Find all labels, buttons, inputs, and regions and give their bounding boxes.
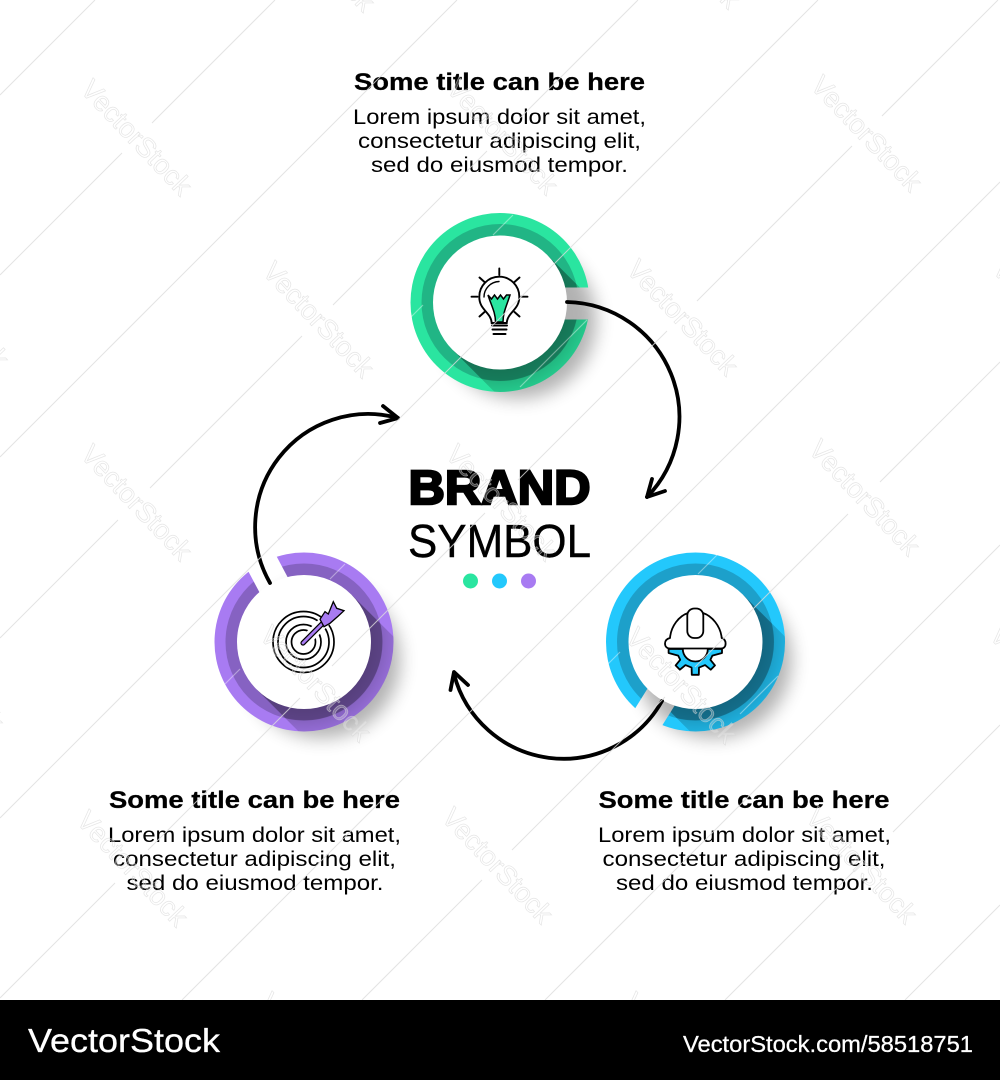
right step: blue ring with helmet: [606, 552, 802, 748]
white disc: [628, 575, 762, 709]
watermark text: VectorStock: [441, 72, 565, 200]
arrow fletching: [320, 602, 344, 627]
body: sed do eiusmod tempor.: [616, 872, 873, 895]
helmet shell: [665, 613, 726, 648]
arrow shaft: [303, 620, 326, 643]
watermark text: VectorStock: [75, 438, 199, 566]
icon: helmet and gear: [665, 608, 726, 675]
ring drop shadow: [244, 582, 400, 738]
arrow: purple to green: [255, 406, 398, 583]
arrow: blue to purple: [450, 672, 662, 759]
title: Some title can be here: [354, 69, 645, 96]
footer url: VectorStock.com/58518751: [683, 1031, 973, 1057]
text block: right: [598, 787, 891, 895]
watermark text: VectorStock: [621, 253, 745, 381]
text block: top: [353, 69, 646, 177]
body: sed do eiusmod tempor.: [371, 154, 628, 177]
watermark text: VectorStock: [805, 69, 929, 197]
watermark text: VectorStock: [803, 433, 927, 561]
BRAND: BRAND: [408, 462, 590, 515]
icon: light bulb: [472, 268, 528, 334]
center heading: [408, 462, 591, 567]
blue ring: [606, 552, 785, 732]
body: sed do eiusmod tempor.: [126, 872, 384, 895]
helmet crest: [687, 608, 703, 638]
body: [598, 824, 891, 895]
white disc: [237, 575, 371, 709]
watermark text: VectorStock: [440, 438, 564, 566]
white disc: [433, 236, 567, 370]
title: Some title can be here: [598, 787, 890, 814]
watermark text: VectorStock: [620, 621, 744, 749]
body: [108, 824, 401, 895]
body: [353, 106, 646, 177]
body: Lorem ipsum dolor sit amet,: [353, 106, 646, 129]
ring drop shadow: [636, 582, 792, 738]
filament: [488, 295, 510, 322]
watermark text: VectorStock: [436, 801, 560, 929]
watermark text: VectorStock: [800, 801, 924, 929]
purple ring: [214, 552, 394, 732]
green ring: [410, 213, 588, 392]
watermark text: VectorStock: [75, 73, 199, 201]
body: Lorem ipsum dolor sit amet,: [598, 824, 891, 847]
ring opening: [310, 614, 332, 636]
text block: left: [108, 787, 401, 895]
left step: purple ring with target: [214, 552, 410, 748]
footer logo: VectorStock: [28, 1022, 221, 1059]
watermark text: VectorStock: [254, 619, 378, 747]
title: Some title can be here: [109, 787, 400, 814]
bulb rays: [472, 268, 528, 316]
center dots: [463, 574, 536, 588]
bulb base: [492, 326, 507, 334]
body: consectetur adipiscing elit,: [602, 848, 886, 871]
icon: target with arrow: [273, 602, 344, 672]
watermark text: VectorStock: [71, 804, 195, 932]
SYMBOL: SYMBOL: [408, 515, 591, 567]
white streaks on rings: [225, 215, 778, 714]
ring drop shadow: [440, 242, 596, 398]
bulb outline: [479, 277, 519, 323]
body: Lorem ipsum dolor sit amet,: [108, 824, 401, 847]
gear: [669, 649, 722, 675]
target rings: [273, 612, 334, 672]
arrow: green to blue: [567, 302, 679, 497]
watermark text: VectorStock: [257, 255, 381, 383]
body: consectetur adipiscing elit,: [358, 130, 641, 153]
top step: green ring with bulb: [410, 213, 606, 408]
footer bar: [0, 1000, 1000, 1080]
body: consectetur adipiscing elit,: [113, 848, 396, 871]
bulb highlight: [484, 282, 499, 297]
